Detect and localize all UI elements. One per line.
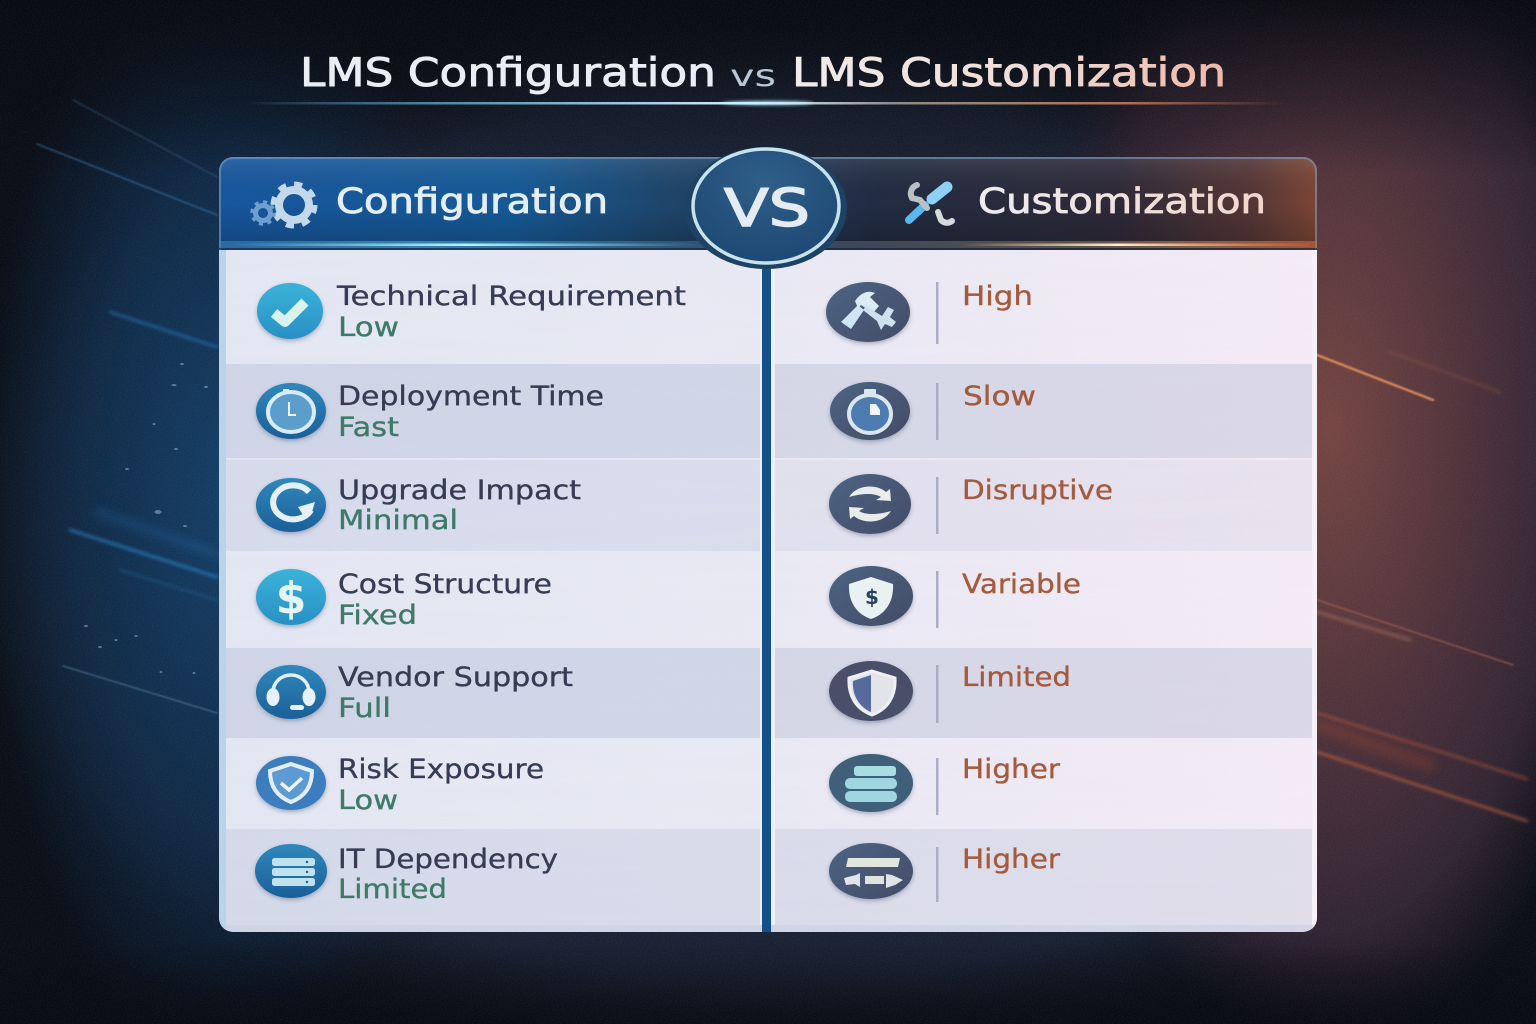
row: Cost Structure [256,569,552,631]
label: Upgrade Impact [338,475,581,506]
value: Fast [338,412,399,443]
icon: tool bar [829,843,913,899]
row: IT Dependency [255,844,558,905]
light streaks: left [37,100,217,713]
separator [936,665,938,723]
icon: half shield [829,661,913,721]
title underline [245,101,1285,105]
label: Vendor Support [338,662,573,693]
label: Risk Exposure [338,754,544,785]
row: Upgrade Impact [256,475,581,536]
title: LMS Customization [792,51,1226,96]
icon: headset [256,665,326,719]
row: Higher (risk) [829,754,1060,815]
icon: sync arrows [829,474,911,534]
panel header [219,157,1317,250]
vs badge [685,147,847,269]
icon: stopwatch [830,382,910,440]
panel: comparison table [219,157,1317,932]
row: Slow [830,381,1036,440]
label: IT Dependency [338,844,558,875]
title: vs [730,59,776,94]
separator [936,758,938,815]
dust: left [84,363,208,674]
icon: dollar shield [829,566,913,626]
icon: clock [256,383,326,439]
icon: upgrade arrow [256,478,326,532]
label: Technical Requirement [336,281,686,312]
row: Disruptive [829,474,1113,534]
value: Slow [963,381,1036,412]
value: Minimal [338,505,458,536]
value: Variable [962,569,1081,600]
separator [936,571,938,628]
title [300,51,1226,96]
row: High [826,281,1033,344]
separator [936,477,938,534]
row: Limited [829,661,1071,723]
shaded table rows [226,364,1312,925]
value: Fixed [338,600,417,631]
light streaks: right [1317,352,1527,821]
icon: dollar [256,569,326,625]
center divider [761,268,771,932]
label: Cost Structure [338,569,552,600]
icon: crossed tools [909,185,952,223]
value: Limited [338,874,447,905]
icon: check [257,283,323,339]
icon: dollar shield: $ [865,585,879,609]
separator [936,383,938,440]
value: Higher [962,844,1060,875]
separator [936,847,938,902]
title: LMS Configuration [300,51,716,96]
value: Higher [962,754,1060,785]
icon: server [255,844,327,898]
icon: hammer and wrench [826,282,910,342]
value: Low [338,312,399,343]
value: Limited [962,662,1071,693]
row: Variable [829,566,1081,628]
icon: gears [252,184,314,226]
vs badge: VS [724,179,810,239]
row: Deployment Time [256,381,604,443]
icon: shield check [256,756,326,810]
row: Risk Exposure [256,754,544,816]
value: Disruptive [962,475,1113,506]
heading: Customization: Customization [978,182,1266,222]
row: Technical Requirement [257,281,686,343]
heading: Configuration: Configuration [336,182,608,222]
value: Low [338,785,398,816]
value: Full [338,693,391,724]
value: High [962,281,1033,312]
label: Deployment Time [338,381,604,412]
separator [936,282,938,344]
icon: database stack [829,754,913,812]
row: Higher (IT dependency) [829,843,1060,902]
icon: dollar: $ [276,573,306,624]
row: Vendor Support [256,662,573,724]
